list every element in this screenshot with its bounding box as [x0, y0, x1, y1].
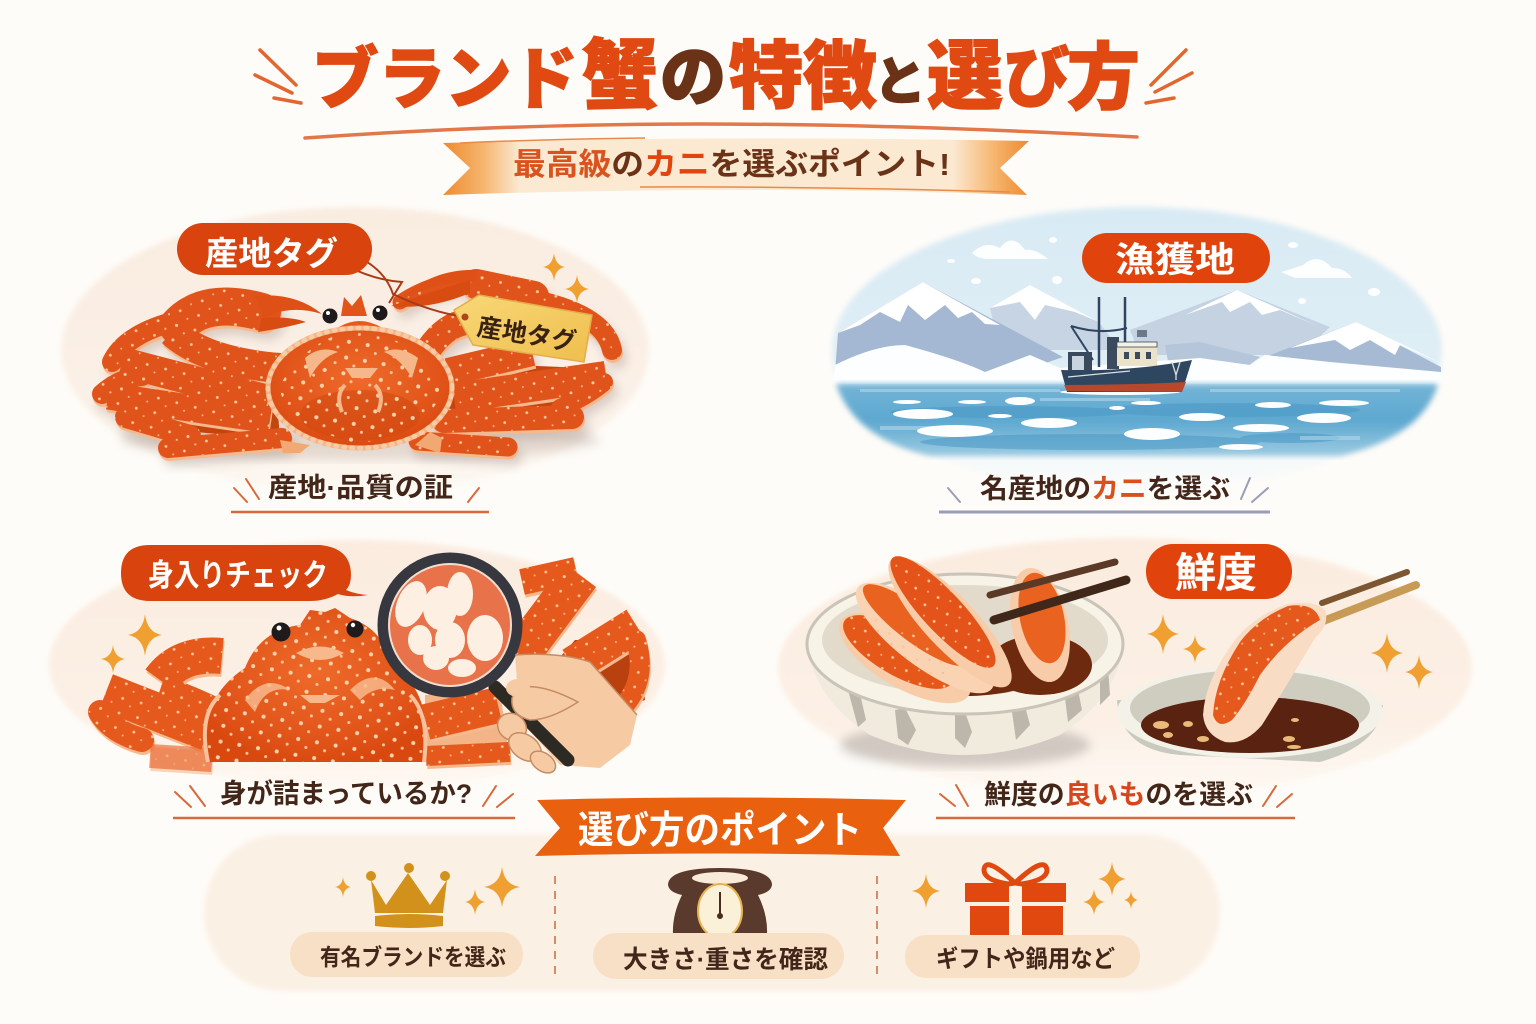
yellow tag: 産地タグ [475, 312, 578, 357]
label: brand: 有名ブランドを選ぶ [320, 944, 506, 970]
pill: fishing grounds heading [1082, 233, 1270, 283]
pill: meat check heading [121, 545, 368, 601]
snowy shoreline [833, 345, 1441, 384]
sky background [832, 207, 1442, 493]
pill: freshness heading [1146, 544, 1292, 599]
title: の [660, 40, 726, 114]
sparkles [543, 253, 589, 303]
yellow tag [454, 295, 592, 362]
thumb and fingers [492, 654, 637, 777]
caption: 産地·品質の証 [268, 473, 453, 503]
clouds and snow [947, 237, 1380, 333]
magnifying glass [383, 558, 568, 760]
panel: freshness [778, 538, 1472, 818]
hand palm [515, 654, 637, 768]
panel: fishing grounds [832, 207, 1442, 512]
crab leg on chopsticks [1203, 572, 1416, 742]
caption [173, 778, 515, 818]
label: size and weight [593, 933, 844, 979]
pill: meat check heading: 身入りチェック [148, 558, 328, 593]
caption: 身が詰まっているか? [220, 778, 472, 809]
panel background [49, 540, 665, 790]
crab body and legs [100, 570, 645, 763]
fishing boat [1061, 297, 1192, 392]
mountains [835, 282, 1441, 372]
subtitle text: 最高級のカニを選ぶポイント! [513, 147, 950, 182]
sea with drift ice [836, 384, 1438, 456]
panel background [204, 834, 1220, 991]
title accent ticks [255, 50, 1192, 103]
caption: 鮮度の良いものを選ぶ [984, 780, 1253, 810]
dipping dish [1117, 666, 1383, 762]
panel background [778, 538, 1472, 798]
label: size and weight: 大きさ·重さを確認 [623, 946, 828, 974]
sparkles [1147, 614, 1433, 689]
pill: origin tag heading [177, 223, 372, 275]
pill: origin tag heading: 産地タグ [205, 235, 338, 272]
panel: origin tag [61, 207, 649, 512]
sparkles [101, 614, 162, 673]
pill: freshness heading: 鮮度 [1175, 550, 1257, 596]
title: び [1004, 41, 1070, 115]
caption: 名産地のカニを選ぶ [980, 474, 1230, 504]
dashed dividers [555, 876, 877, 976]
title: ブランド [312, 42, 578, 118]
caption [936, 780, 1295, 818]
icon: gift [965, 865, 1066, 935]
title: 方 [1067, 38, 1140, 119]
label: gift use [905, 935, 1140, 978]
label: gift use: ギフトや鍋用など [936, 946, 1115, 973]
crab with origin tag [102, 270, 617, 460]
title: 特徴 [729, 35, 877, 118]
bowl of crab [807, 541, 1126, 767]
pill: fishing grounds heading: 漁獲地 [1115, 241, 1235, 280]
panel background [61, 207, 649, 493]
icon: crown [366, 863, 450, 928]
section ribbon [535, 798, 906, 856]
section ribbon: 選び方のポイント [578, 810, 862, 852]
title underline [305, 124, 1137, 138]
label: brand [290, 932, 523, 977]
gift sparkles [912, 862, 1138, 915]
title: 蟹 [582, 34, 658, 119]
icon: scale [668, 868, 772, 938]
panel: meat check [49, 540, 665, 818]
title: 選 [927, 35, 1003, 120]
title: と [874, 54, 926, 112]
panel: selection points [204, 798, 1220, 991]
caption [939, 474, 1270, 512]
crown sparkles [335, 867, 520, 915]
caption [231, 473, 489, 512]
tag strings [349, 257, 465, 317]
title [312, 34, 1140, 120]
subtitle ribbon [443, 138, 1029, 195]
